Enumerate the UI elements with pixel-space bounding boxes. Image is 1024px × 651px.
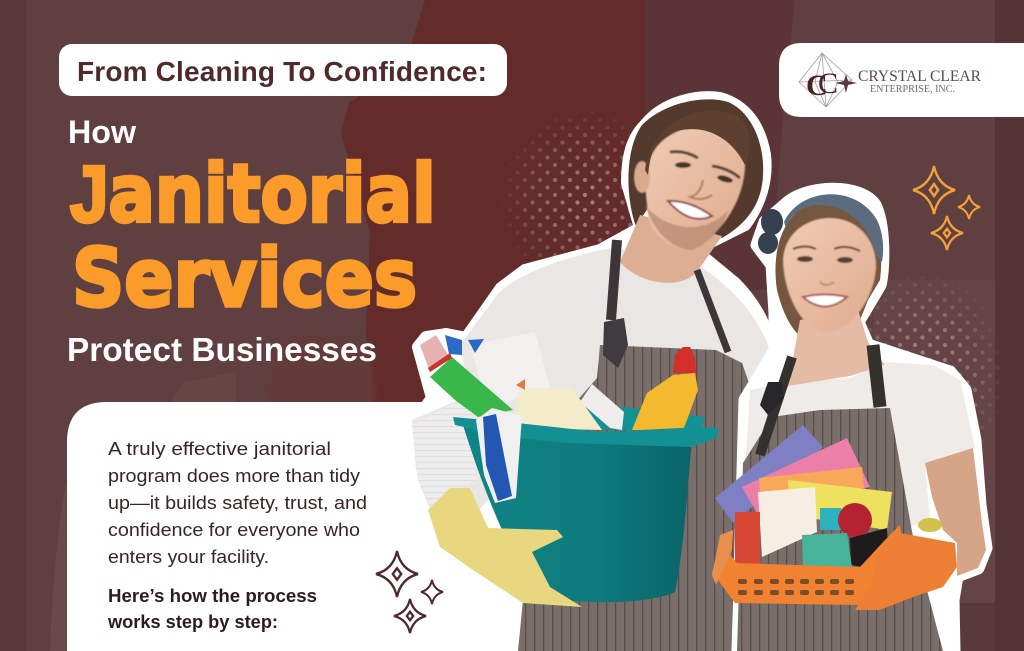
yellow bottle	[632, 347, 698, 430]
woman hair bow	[758, 209, 783, 254]
towel in bucket	[470, 332, 552, 415]
yellow cloth	[788, 480, 892, 530]
intro paragraph: confidence for everyone who	[108, 520, 360, 540]
intro paragraph: up—it builds safety, trust, and	[108, 493, 367, 513]
man smile	[668, 201, 712, 219]
man ear	[634, 161, 650, 193]
man hair fringe	[645, 111, 749, 175]
woman smile	[803, 294, 847, 306]
title: Protect Businesses: Protect Businesses	[67, 331, 377, 368]
intro paragraph: enters your facility.	[108, 547, 269, 567]
purple card	[715, 425, 823, 523]
man face	[634, 125, 745, 250]
woman arm	[925, 448, 986, 576]
yellow glove	[428, 488, 582, 607]
woman chest skin	[788, 310, 885, 386]
green bottle	[420, 335, 513, 417]
woman face	[783, 218, 876, 332]
man sticker outline	[416, 97, 776, 651]
figure: man with bucket	[412, 97, 776, 651]
right orange glove	[855, 533, 957, 610]
title: Janitorial: Janitorial	[70, 148, 436, 241]
orange sparkles	[913, 166, 980, 250]
man strap knot	[603, 318, 628, 368]
subtitle pill: From Cleaning To Confidence:	[77, 56, 487, 87]
orange card	[759, 467, 864, 495]
logo panel	[779, 43, 1024, 117]
halftone dots upper	[508, 118, 632, 262]
white sponge	[516, 388, 602, 430]
woman shirt	[745, 362, 975, 530]
black scrubber	[850, 528, 888, 567]
logo wordmark: CRYSTAL CLEAR	[858, 68, 982, 85]
blue brush heads	[445, 335, 484, 355]
pink card	[742, 438, 870, 513]
woman eyes	[797, 256, 813, 262]
process lead-in: works step by step:	[107, 612, 278, 632]
green sponge	[802, 533, 852, 567]
logo star	[835, 74, 857, 93]
woman headband	[784, 194, 883, 262]
text panel	[67, 402, 530, 651]
red bristle brush	[838, 503, 872, 537]
woman nose shade	[820, 282, 834, 285]
teal mini sponge	[820, 508, 841, 530]
man eyes and brows	[675, 162, 691, 168]
man sleeve	[412, 395, 476, 510]
blue scrub brush	[476, 408, 522, 503]
woman hair	[775, 197, 881, 340]
orange tag	[516, 379, 525, 390]
yellow gloves in waistband	[918, 518, 942, 532]
logo diamond mark	[799, 53, 852, 107]
woman strap knot	[760, 382, 784, 415]
man nose shade	[690, 180, 712, 199]
subtitle pill	[59, 44, 507, 96]
logo sub wordmark: ENTERPRISE, INC.	[870, 84, 955, 95]
left orange glove fingers	[712, 530, 733, 585]
logo CC letters	[806, 67, 838, 102]
bucket	[453, 417, 718, 602]
man apron	[518, 345, 755, 651]
title: How: How	[68, 114, 136, 150]
figure: woman with basket	[712, 189, 986, 651]
man hair back	[628, 99, 763, 238]
process lead-in: Here’s how the process	[108, 586, 317, 606]
woman apron straps	[760, 345, 880, 455]
white scrub brush	[580, 384, 624, 430]
logo CC letters: C	[818, 67, 838, 100]
title: Services: Services	[72, 233, 417, 326]
woman sticker outline	[738, 189, 986, 651]
man shirt	[412, 248, 776, 520]
process lead-in	[107, 586, 317, 632]
cream sponge	[758, 487, 817, 557]
intro paragraph: program does more than tidy	[108, 466, 360, 486]
red sponge	[735, 512, 760, 564]
logo CC letters: C	[806, 69, 828, 102]
woman apron	[737, 408, 943, 651]
orange basket	[712, 525, 902, 605]
halftone dots right	[868, 278, 998, 430]
intro paragraph	[108, 439, 367, 567]
man stubble	[645, 205, 728, 250]
intro paragraph: A truly effective janitorial	[108, 439, 331, 459]
man neck	[620, 215, 722, 283]
man apron straps	[611, 240, 728, 352]
brown sparkles	[376, 551, 443, 633]
bucket back rim	[560, 407, 705, 430]
